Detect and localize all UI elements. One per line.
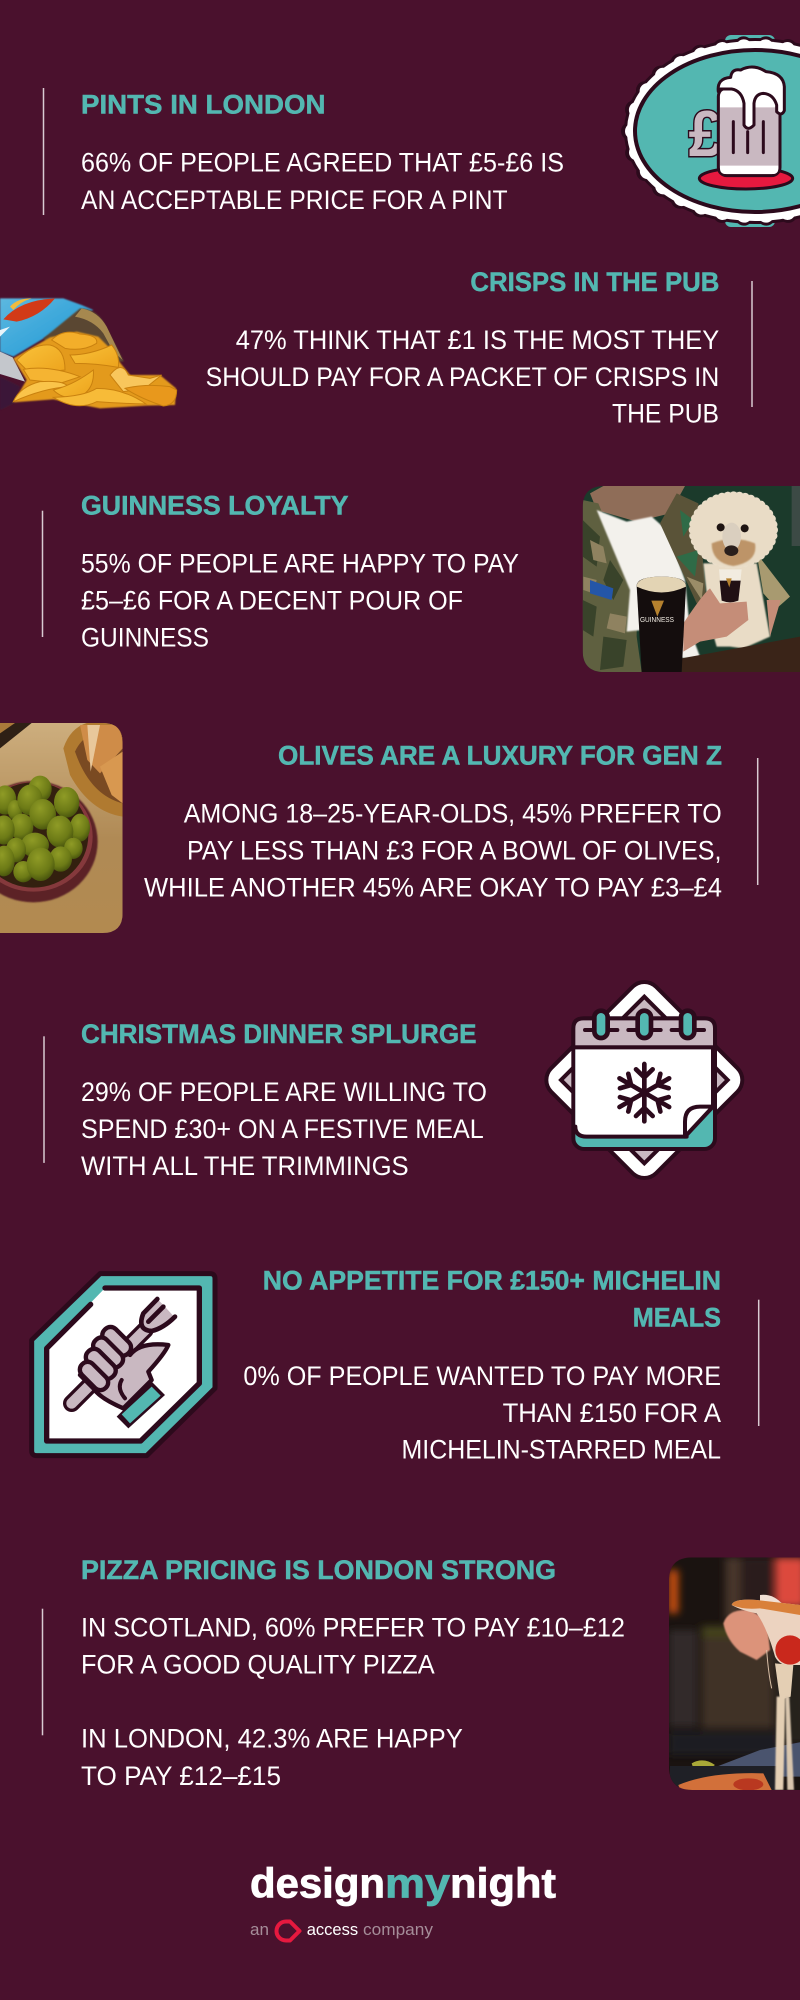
tagline: an access company: an [250, 1920, 269, 1939]
icon: access logo mark [276, 1922, 300, 1940]
panel: pints in London [44, 35, 800, 227]
text: crisps statistic: THE PUB [612, 399, 719, 429]
icon: festive calendar [561, 997, 728, 1163]
heading: pizza pricing: PIZZA PRICING IS LONDON STRONG [81, 1555, 556, 1585]
heading: no appetite for Michelin meals: MEALS [633, 1303, 721, 1333]
text: Scotland statistic [81, 1613, 625, 1680]
panel: pizza pricing [42, 1555, 800, 1791]
text: Christmas statistic: SPEND £30+ ON A FESTIVE MEAL [81, 1114, 484, 1144]
heading: Guinness loyalty: GUINNESS LOYALTY [81, 490, 348, 520]
text: pints statistic [81, 148, 564, 215]
text: London statistic: TO PAY £12–£15 [81, 1761, 281, 1791]
panel: Guinness loyalty [42, 486, 800, 672]
text: London statistic: IN LONDON, 42.3% ARE HAPPY [81, 1724, 463, 1754]
wordmark [250, 1860, 556, 1907]
heading: crisps in the pub: CRISPS IN THE PUB [470, 267, 719, 297]
text: Christmas statistic: WITH ALL THE TRIMMINGS [81, 1151, 409, 1181]
divider: pizza [42, 1609, 44, 1735]
text: pints statistic: 66% OF PEOPLE AGREED THAT £5-£6 IS [81, 148, 564, 178]
photo: bowl of olives [0, 723, 123, 933]
text: Guinness statistic [81, 548, 519, 652]
photo: man and dog with Guinness: GUINNESS [640, 615, 674, 624]
divider: Michelin [758, 1300, 760, 1426]
text: Christmas statistic: 29% OF PEOPLE ARE WILLING TO [81, 1077, 487, 1107]
logo: DesignMyNight [250, 1860, 556, 1940]
divider: Guinness [42, 511, 44, 637]
text: Michelin statistic: THAN £150 FOR A [503, 1398, 721, 1428]
wordmark: design [250, 1860, 385, 1907]
icon: beer badge [624, 35, 800, 227]
text: Guinness statistic: £5–£6 FOR A DECENT POUR OF [81, 585, 463, 615]
text: crisps statistic [206, 325, 720, 429]
text: Christmas statistic [81, 1077, 487, 1181]
text: Guinness statistic: GUINNESS [81, 622, 209, 652]
divider: pints [42, 88, 44, 215]
text: Scotland statistic: FOR A GOOD QUALITY PIZZA [81, 1650, 435, 1680]
heading: no appetite for Michelin meals: NO APPETITE FOR £150+ MICHELIN [263, 1266, 721, 1296]
icon: beer badge: £ [689, 97, 722, 170]
text: crisps statistic: 47% THINK THAT £1 IS THE MOST THEY [236, 325, 720, 355]
panel: olives are a luxury for Gen Z [0, 723, 758, 933]
icon: hand gripping fork [32, 1274, 215, 1456]
tagline: an access company [250, 1920, 434, 1939]
wordmark: my [385, 1860, 451, 1907]
divider: olives [757, 758, 759, 885]
panel: crisps in the pub [0, 267, 752, 429]
text: Scotland statistic: IN SCOTLAND, 60% PREFER TO PAY £10–£12 [81, 1613, 625, 1643]
heading: pints in London: PINTS IN LONDON [81, 90, 326, 120]
text: pints statistic: AN ACCEPTABLE PRICE FOR A PINT [81, 185, 508, 215]
heading: olives: OLIVES ARE A LUXURY FOR GEN Z [278, 740, 722, 770]
text: Michelin statistic [243, 1361, 721, 1465]
text: crisps statistic: SHOULD PAY FOR A PACKET OF CRISPS IN [206, 362, 719, 392]
text: London statistic [81, 1724, 463, 1791]
panel: Christmas dinner splurge [44, 997, 728, 1181]
text: Guinness statistic: 55% OF PEOPLE ARE HAPPY TO PAY [81, 548, 519, 578]
photo: crisp packet [0, 298, 177, 410]
photo: man and dog with Guinness [583, 486, 800, 672]
text: olives statistic: PAY LESS THAN £3 FOR A BOWL OF OLIVES, [187, 835, 722, 865]
photo: pizza slice with cheese pull [668, 1557, 800, 1791]
text: Michelin statistic: MICHELIN-STARRED MEAL [402, 1435, 721, 1465]
text: olives statistic: WHILE ANOTHER 45% ARE OKAY TO PAY £3–£4 [144, 873, 722, 903]
heading: Christmas dinner splurge: CHRISTMAS DINNER SPLURGE [81, 1019, 476, 1049]
text: olives statistic: AMONG 18–25-YEAR-OLDS, 45% PREFER TO [184, 798, 722, 828]
wordmark: night [450, 1860, 556, 1907]
text: olives statistic [144, 798, 722, 903]
panel: no appetite for Michelin meals [32, 1266, 759, 1465]
tagline: an access company: access [307, 1920, 358, 1939]
tagline: an access company: company [363, 1920, 434, 1939]
divider: crisps [751, 281, 753, 407]
divider: Christmas [43, 1036, 45, 1163]
heading: no appetite for Michelin meals [263, 1266, 721, 1333]
text: Michelin statistic: 0% OF PEOPLE WANTED TO PAY MORE [243, 1361, 721, 1391]
